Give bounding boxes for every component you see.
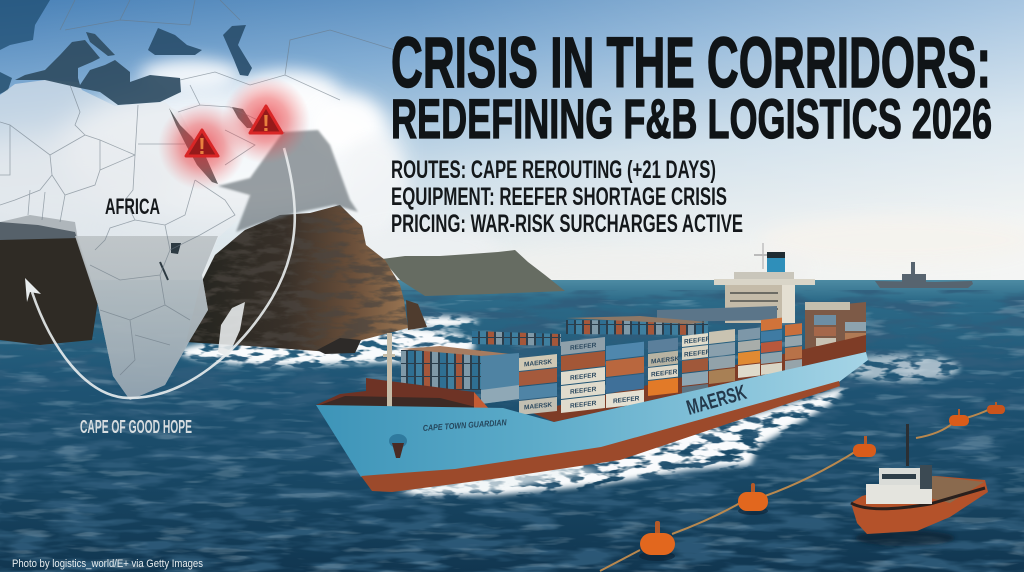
seas: Atlantic corner — [0, 0, 50, 50]
clouds — [0, 59, 1024, 286]
stack block C with reefer units: REEFER — [570, 386, 597, 396]
label: Africa: AFRICA — [105, 194, 160, 219]
routes line: ROUTES: CAPE REROUTING (+21 DAYS) — [391, 156, 716, 184]
Persian Gulf — [232, 107, 255, 128]
stack block C with reefer units — [561, 337, 605, 413]
foam around cliffs and bow — [180, 316, 960, 382]
seas: Atlantic west — [0, 72, 12, 94]
ship superstructure — [714, 243, 815, 323]
stack block E: MAERSK — [651, 355, 679, 366]
warning triangle — [250, 106, 282, 133]
route arrowhead — [25, 278, 41, 302]
rope — [600, 409, 990, 571]
buoy 3 — [853, 436, 876, 457]
label: Cape of Good Hope: CAPE OF GOOD HOPE — [80, 417, 192, 437]
tug deck — [930, 476, 984, 503]
stack block C with reefer units: REEFER — [570, 372, 597, 382]
stack block E — [648, 337, 679, 396]
country borders — [0, 0, 395, 375]
left cliff — [0, 238, 98, 345]
Adriatic Sea — [86, 32, 115, 56]
main cliff — [186, 205, 408, 352]
cliff rock texture — [186, 205, 408, 352]
wake foam — [395, 385, 850, 496]
exclamation mark: ! — [262, 110, 270, 136]
pricing line: PRICING: WAR-RISK SURCHARGES ACTIVE — [391, 210, 743, 238]
front stack block A — [401, 346, 519, 404]
stack block B: MAERSK — [524, 359, 552, 368]
stack block B — [519, 354, 557, 415]
red glow — [222, 76, 310, 164]
buoy 4 — [949, 409, 969, 426]
warning triangle — [186, 130, 218, 156]
stack block F: REEFER — [684, 336, 711, 346]
Africa and Arabia land — [0, 80, 250, 400]
Lake Victoria — [171, 243, 181, 254]
Africa lower section — [75, 236, 218, 400]
hull — [316, 352, 868, 477]
buoy 1 — [639, 521, 675, 561]
Indian Ocean and Arabian Sea — [218, 130, 358, 232]
stack block F — [682, 333, 711, 399]
buoy 2 — [738, 483, 768, 515]
rear stacks — [805, 302, 866, 360]
Mediterranean Sea — [15, 40, 181, 105]
stack block C with reefer units: REEFER — [570, 400, 597, 410]
red glow — [158, 102, 246, 190]
Madagascar — [218, 302, 245, 357]
warship — [875, 262, 973, 288]
mooring rope and buoys — [600, 402, 1005, 571]
photo credit: Photo by logistics_world/E+ via Getty Images — [12, 558, 203, 570]
back container row — [657, 306, 777, 322]
hazard: Red Sea warning — [158, 102, 246, 190]
tug mast — [906, 424, 909, 466]
cliffs — [0, 205, 427, 354]
tug hull — [851, 476, 988, 534]
stack block D: REEFER — [613, 395, 640, 405]
hull waterline stripe — [361, 381, 840, 492]
Red Sea — [169, 108, 218, 184]
base rocks — [317, 338, 361, 354]
route arc — [32, 148, 295, 398]
anchor — [389, 434, 407, 458]
bow wall and deck — [316, 333, 490, 412]
ship name: CAPE TOWN GUARDIAN — [422, 417, 508, 433]
Caspian Sea — [223, 25, 252, 76]
left cliff haze band — [0, 215, 78, 240]
stack block F: REEFER — [684, 349, 711, 359]
key points — [391, 156, 743, 238]
stack block C with reefer units: REEFER — [570, 342, 597, 352]
hazard: Gulf warning — [222, 76, 310, 164]
exclamation mark: ! — [198, 133, 206, 159]
sky brightening to the right — [0, 0, 1024, 290]
offshore rock — [406, 300, 427, 330]
distant headland — [382, 250, 565, 296]
hull logo: MAERSK — [684, 381, 749, 420]
sea texture: light whitecaps — [0, 300, 1024, 572]
stack block E: REEFER — [651, 369, 678, 379]
buoy 5 — [987, 402, 1005, 414]
map overlay — [0, 0, 395, 400]
Lake Tanganyika — [160, 262, 168, 280]
sea texture: dark swell — [0, 290, 1024, 572]
equipment line: EQUIPMENT: REEFER SHORTAGE CRISIS — [391, 183, 727, 211]
tugboat — [851, 424, 988, 546]
tug fender — [851, 488, 985, 509]
deck lattice — [530, 335, 866, 422]
stack block D — [606, 342, 644, 408]
background: sky — [0, 0, 1024, 290]
sea — [0, 280, 1024, 572]
aft stacks — [709, 318, 802, 384]
stack block B: MAERSK — [524, 402, 552, 411]
container ship — [316, 243, 868, 492]
Black Sea — [148, 28, 202, 55]
title block — [391, 24, 992, 150]
tug cabin — [866, 484, 932, 504]
